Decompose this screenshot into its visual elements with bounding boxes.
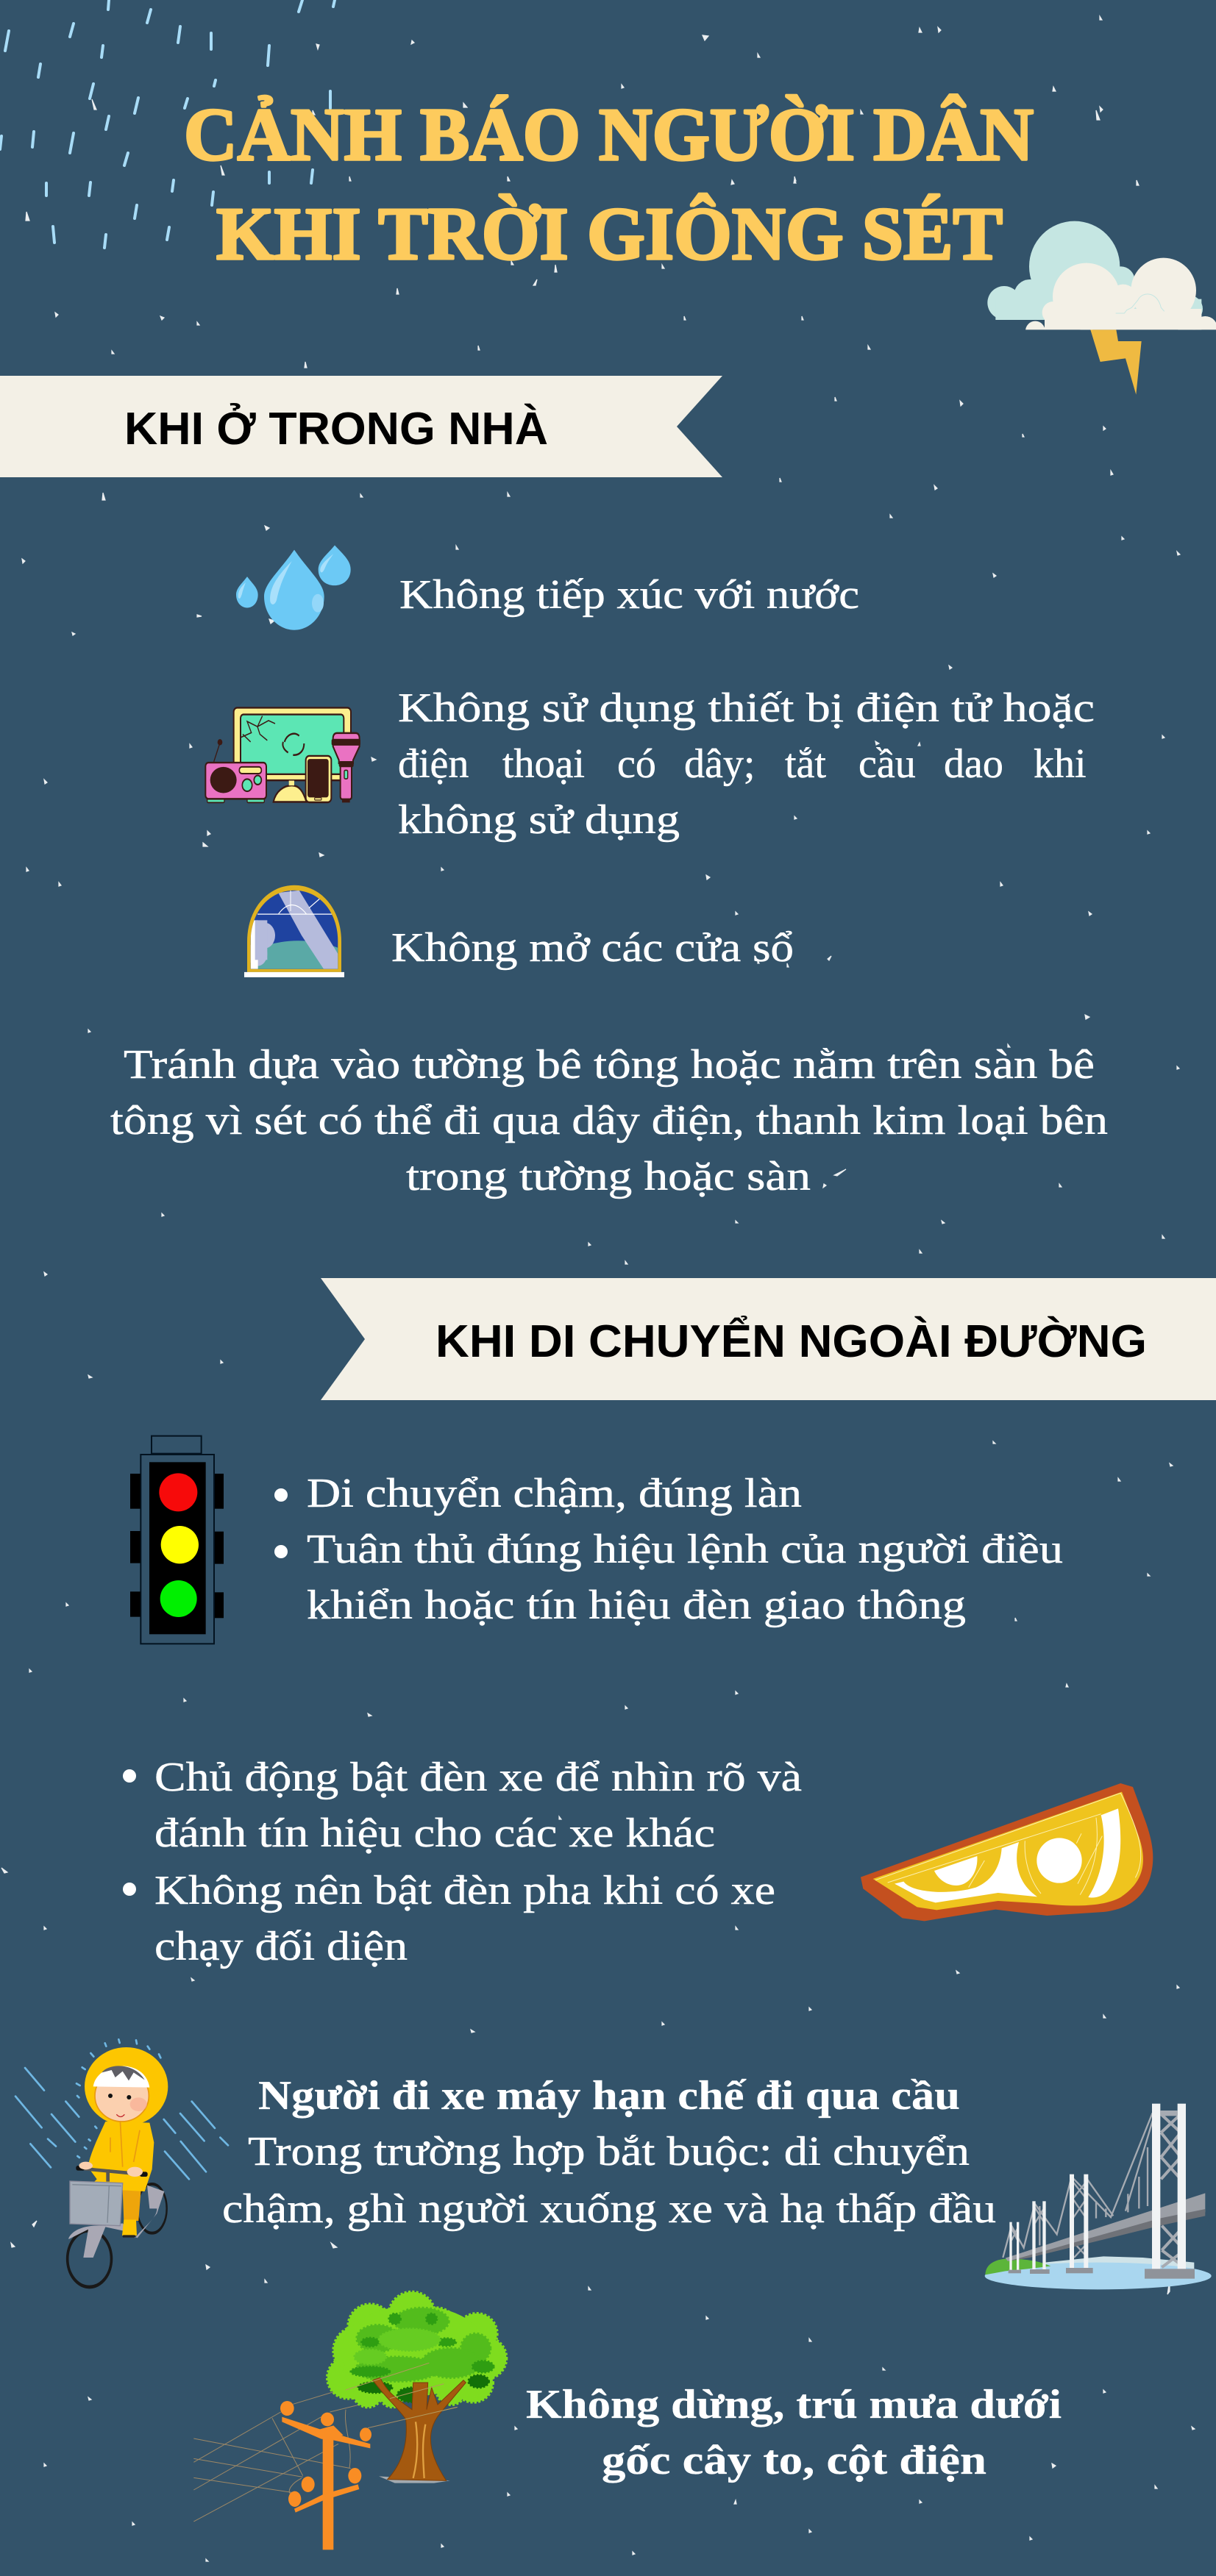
bullets: move slowly, obey signals [274, 1471, 1063, 1628]
text: do not shelter under trees or poles [526, 2382, 1062, 2483]
bullets: use headlights [123, 1755, 802, 1969]
text: motorbike riders limit bridges [222, 2073, 996, 2232]
icon: water drops [236, 545, 351, 630]
text: do not use electric devices: cầu [858, 741, 916, 787]
icon: suspension bridge [985, 2104, 1212, 2289]
text: do not shelter under trees or poles: gốc cây to, cột điện [602, 2438, 986, 2483]
text: do not use electric devices [398, 685, 1095, 843]
text: motorbike riders limit bridges: Người đi xe máy hạn chế đi qua cầu [258, 2073, 960, 2119]
bullets: use headlights: Chủ động bật đèn xe để nhìn rõ và [154, 1755, 802, 1800]
text: avoid leaning on concrete walls: trong tường hoặc sàn [406, 1154, 811, 1199]
text: avoid leaning on concrete walls: Tránh dựa vào tường bê tông hoặc nằm trên sàn bê [124, 1042, 1095, 1088]
icon: window in the storm [244, 885, 344, 977]
icon: car headlight [861, 1783, 1153, 1921]
text: motorbike riders limit bridges: Trong trường hợp bắt buộc: di chuyển [248, 2129, 970, 2174]
icon: electronic devices [205, 707, 360, 802]
bullets: use headlights: chạy đối diện [154, 1924, 408, 1969]
bullets: use headlights: đánh tín hiệu cho các xe khác [154, 1810, 715, 1856]
text: do not open windows: Không mở các cửa sổ [391, 925, 794, 971]
bullets: move slowly, obey signals: khiển hoặc tín hiệu đèn giao thông [307, 1583, 966, 1628]
bullets: move slowly, obey signals: Tuân thủ đúng hiệu lệnh của người điều [307, 1527, 1063, 1572]
text: do not use electric devices: có [617, 741, 656, 787]
text: avoid leaning on concrete walls [110, 1042, 1108, 1199]
text: do not use electric devices: Không sử dụng thiết bị điện tử hoặc [398, 685, 1095, 731]
icon: big tree [327, 2292, 506, 2483]
icon: power pole [193, 2363, 458, 2550]
icon: cyclist in raincoat [15, 2039, 228, 2287]
icon: traffic light [130, 1436, 224, 1644]
text: motorbike riders limit bridges: chậm, ghì người xuống xe và hạ thấp đầu [222, 2186, 996, 2232]
text: do not shelter under trees or poles: Không dừng, trú mưa dưới [526, 2382, 1062, 2427]
title: KHI TRỜI GIÔNG SÉT [216, 193, 1003, 276]
bullets: use headlights: Không nên bật đèn pha khi có xe [154, 1868, 775, 1913]
text: do not use electric devices: điện [398, 741, 469, 787]
text: no contact with water: Không tiếp xúc với nước [399, 572, 859, 618]
text: do not use electric devices: tắt [785, 741, 826, 787]
icon: storm cloud with lightning [987, 221, 1216, 395]
section banner: indoors: KHI Ở TRONG NHÀ [124, 404, 548, 454]
text: do not use electric devices: thoại [502, 741, 585, 787]
text: do not use electric devices: không sử dụng [398, 797, 680, 843]
text: do not use electric devices: dao [944, 741, 1003, 787]
section banner: indoors [0, 376, 722, 477]
bullets: move slowly, obey signals: Di chuyển chậm, đúng làn [307, 1471, 802, 1516]
rain streaks [0, 0, 335, 248]
text: do not use electric devices: dây; [684, 741, 755, 787]
text: avoid leaning on concrete walls: tông vì sét có thể đi qua dây điện, thanh kim loại bên [110, 1098, 1108, 1143]
title: CẢNH BÁO NGƯỜI DÂN [184, 93, 1034, 176]
section banner: on the road [321, 1278, 1216, 1400]
text: do not use electric devices: khi [1034, 741, 1087, 787]
title [184, 93, 1034, 276]
section banner: on the road: KHI DI CHUYỂN NGOÀI ĐƯỜNG [435, 1316, 1147, 1367]
